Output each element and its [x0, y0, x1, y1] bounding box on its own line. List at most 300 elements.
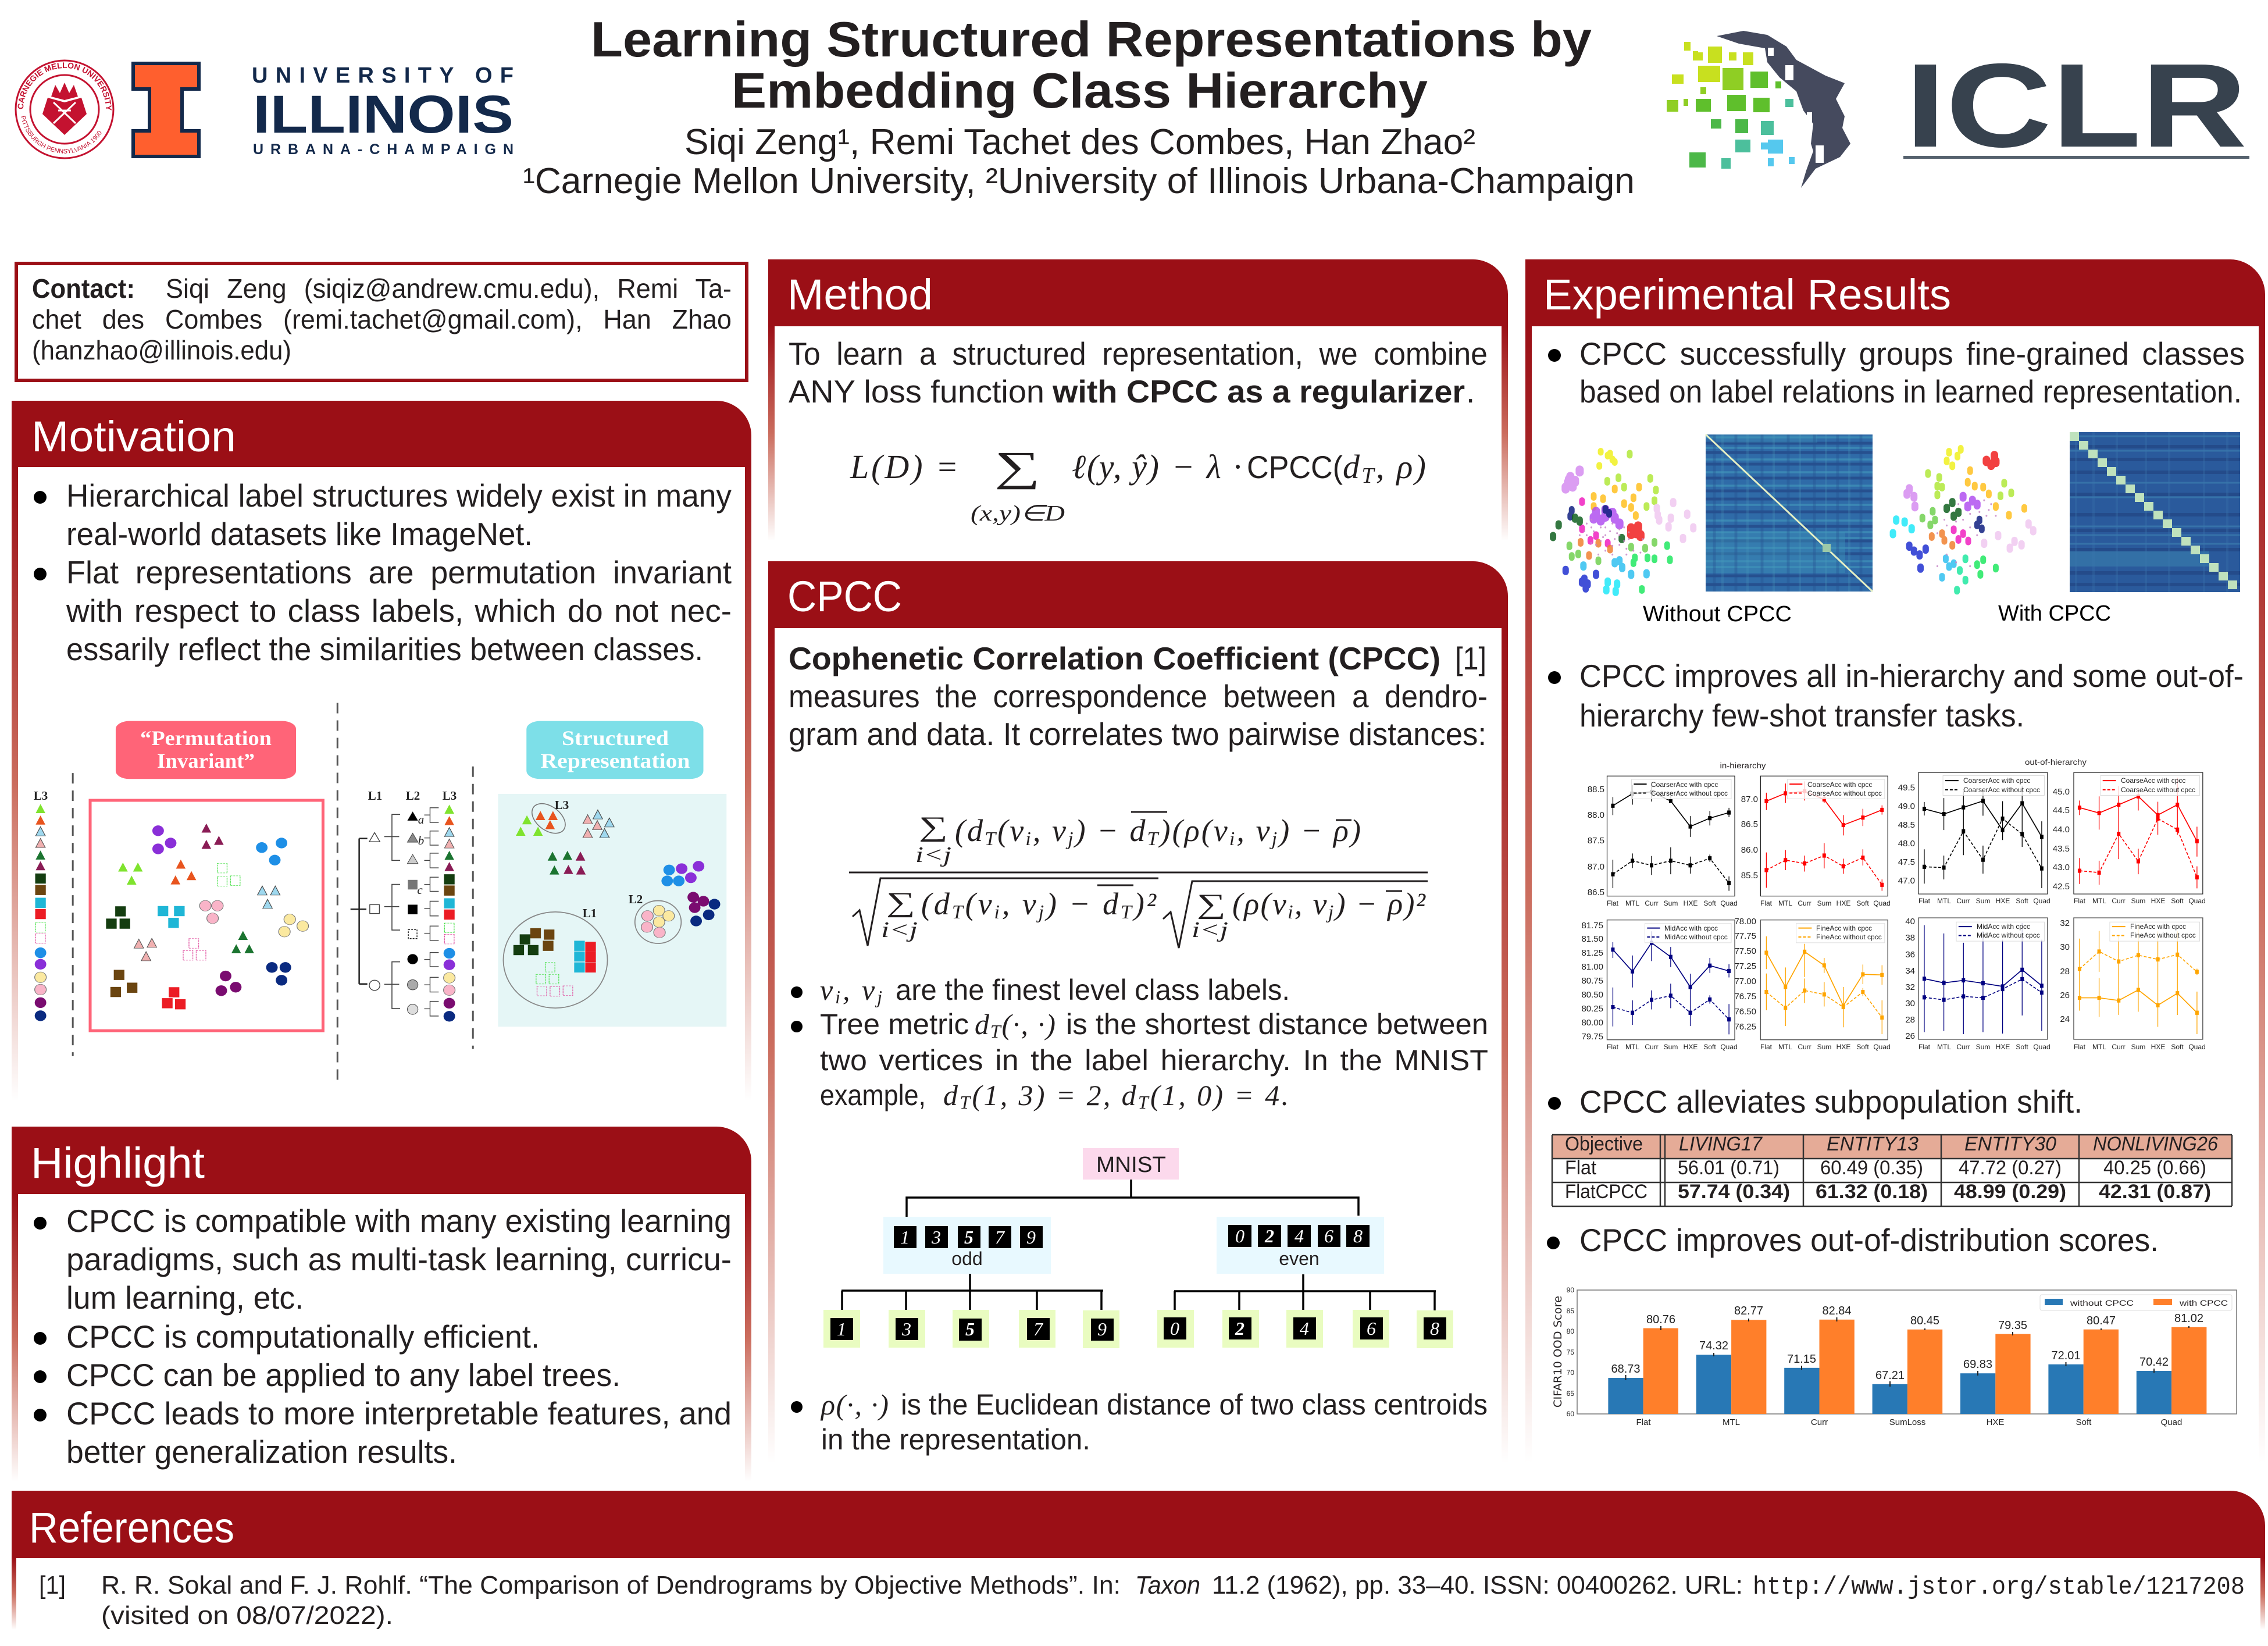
equation: CPCC fraction: ) − ρ) [1277, 813, 1361, 848]
value labels: 80.47 [2087, 1314, 2116, 1327]
chart titles: in-hierarchy [1720, 761, 1766, 770]
tick labels and legends: 44.5 [2053, 806, 2070, 815]
tick labels and legends: Flat [1607, 899, 1619, 907]
value labels: 79.35 [1998, 1319, 2027, 1332]
hierarchy level labels: a [418, 813, 424, 826]
row: Flat: 40.25 (0.66) [2103, 1157, 2206, 1179]
plot lines and error bars [1607, 772, 2203, 1040]
equation: CPCC fraction: i<j [1192, 918, 1228, 942]
leaf nodes: 8 [1430, 1318, 1439, 1339]
heading: Experimental Results [1543, 270, 1951, 319]
equation: CPCC fraction: (v [997, 813, 1024, 848]
intro text [789, 336, 1488, 409]
tick labels and legends: 49.5 [1898, 783, 1915, 793]
legend [2040, 1295, 2232, 1310]
tick labels and legends: Quad [2033, 897, 2051, 905]
tick labels and legends: MTL [2092, 1043, 2106, 1051]
heatmap without CPCC [1706, 434, 1873, 592]
label: permutation invariant: “Permutation [140, 726, 272, 750]
bullet list: definitions: are the finest level class labels. [896, 974, 1290, 1006]
tick labels and legends: 34 [1905, 966, 1915, 976]
row: Flat [1565, 1157, 2206, 1179]
tick labels and legends: Sum [1817, 1043, 1831, 1051]
panel: references [12, 1491, 2265, 1630]
tick labels and legends: MTL [1937, 1043, 1951, 1051]
definition text: measures the correspondence between a dendro- [789, 678, 1488, 714]
header row: Objective [1565, 1133, 1643, 1155]
node: even: 2 [1264, 1225, 1274, 1246]
tick labels and legends: Flat [1760, 899, 1773, 907]
bullet list: definitions: Tree metric [820, 1008, 969, 1041]
x axis categories: HXE [1987, 1417, 2004, 1427]
tick labels and legends: 77.25 [1734, 961, 1756, 971]
definition text: Cophenetic Correlation Coefficient (CPCC) [789, 640, 1440, 676]
intro text: . [1466, 373, 1475, 409]
hierarchy level labels: b [418, 833, 424, 847]
tick labels and legends: MidAcc without cpcc [1664, 933, 1728, 941]
affiliations: ¹Carnegie Mellon University, ²University of Illinois Urbana-Champaign [523, 161, 1635, 201]
tick labels and legends: 88.0 [1588, 810, 1604, 820]
y axis ticks and title: 60 [1567, 1410, 1574, 1418]
tick labels and legends: MTL [2092, 897, 2106, 905]
x axis categories: Quad [2161, 1417, 2182, 1427]
equation: CPCC fraction: ) − ρ)² [1333, 886, 1426, 921]
tick labels and legends: MTL [1778, 899, 1792, 907]
tick labels and legends: CoarserAcc without cpcc [1963, 786, 2040, 794]
tick labels and legends: 30 [2060, 942, 2070, 952]
node: even: 8 [1353, 1225, 1363, 1246]
value labels: 69.83 [1963, 1358, 1992, 1371]
bullet list: definitions: example, [820, 1079, 926, 1111]
bullet list: Hierarchical label structures widely exist in many [66, 478, 732, 514]
bullet list: definitions: T [1138, 1092, 1150, 1113]
tick labels and legends: 26 [2060, 991, 2070, 1000]
tick labels and legends: 86.5 [1588, 888, 1604, 897]
label: structured representation: Structured [562, 726, 669, 750]
citation: 11.2 (1962), pp. 33–40. ISSN: 00400262. URL: [1212, 1571, 1743, 1599]
tick labels and legends: MTL [1625, 1043, 1639, 1051]
tick labels and legends: 49.0 [1898, 801, 1915, 811]
equation: CPCC fraction: (ρ(v [1232, 886, 1286, 921]
equation: loss: T [1361, 464, 1375, 488]
tick labels and legends: Quad [1720, 1043, 1738, 1051]
bullet list: paradigms, such as multi-task learning, curricu- [66, 1241, 732, 1277]
tick labels and legends: MidAcc with cpcc [1664, 924, 1718, 932]
tick labels and legends: Flat [1918, 1043, 1931, 1051]
hierarchy level labels: L3 [555, 798, 569, 812]
tick labels and legends: 87.0 [1588, 862, 1604, 872]
tick labels and legends: HXE [1836, 899, 1850, 907]
hierarchy level labels: L1 [583, 906, 597, 920]
tick labels and legends: Flat [1918, 897, 1931, 905]
node: even: 0 [1235, 1225, 1244, 1246]
tick labels and legends: Curr [1956, 897, 1970, 905]
x axis categories: SumLoss [1889, 1417, 1925, 1427]
title: Embedding Class Hierarchy [732, 63, 1428, 119]
tick labels and legends: Soft [2016, 897, 2028, 905]
y axis ticks and title: 85 [1567, 1307, 1574, 1315]
bullet: subpopulation shift: CPCC alleviates subpopulation shift. [1579, 1084, 2082, 1120]
title [591, 12, 1592, 119]
equation: CPCC fraction: j [1326, 902, 1333, 923]
leaf nodes: 9 [1097, 1319, 1107, 1339]
tick labels and legends: 26 [1905, 1031, 1915, 1041]
value labels: 72.01 [2051, 1349, 2081, 1362]
tick labels and legends: Soft [1856, 1043, 1869, 1051]
tick labels and legends: HXE [1684, 1043, 1698, 1051]
y axis ticks and title: CIFAR10 OOD Score [1552, 1296, 1564, 1408]
panel: highlight [12, 1127, 751, 1481]
tick labels and legends: Quad [2033, 1043, 2051, 1051]
leaf nodes: 3 [901, 1319, 911, 1339]
leaf nodes: 5 [965, 1319, 975, 1339]
tick labels and legends: 77.50 [1734, 946, 1756, 956]
tick labels and legends: 80.75 [1581, 976, 1603, 986]
heading: CPCC [787, 572, 902, 621]
tick labels and legends: Curr [1645, 899, 1659, 907]
label: structured representation: Representation [541, 749, 690, 772]
tick labels and legends: Sum [1976, 1043, 1990, 1051]
node: odd: 5 [964, 1227, 973, 1248]
tick labels and legends: 43.5 [2053, 844, 2070, 854]
tick labels and legends: HXE [2151, 1043, 2165, 1051]
heading: References [29, 1504, 234, 1552]
tick labels and legends: MTL [1778, 1043, 1792, 1051]
equation: CPCC fraction: j [1036, 902, 1044, 923]
tick labels and legends: 47.5 [1898, 857, 1915, 867]
value labels: 68.73 [1611, 1363, 1641, 1376]
row: FlatCPCC: 57.74 (0.34) [1678, 1181, 1790, 1203]
tick labels and legends: CoarserAcc without cpcc [1651, 789, 1728, 797]
tick labels and legends: 81.25 [1581, 948, 1603, 958]
tick labels and legends: Quad [1873, 899, 1891, 907]
intro text: To learn a structured representation, we combine [789, 336, 1488, 372]
header row: NONLIVING26 [2093, 1133, 2218, 1155]
bullet: few-shot transfer: hierarchy few-shot transfer tasks. [1579, 697, 2024, 733]
tick labels and legends: 76.25 [1734, 1022, 1756, 1032]
tick labels and legends: FineAcc without cpcc [2130, 931, 2196, 939]
value labels: 80.45 [1910, 1314, 1939, 1327]
row: Flat: 56.01 (0.71) [1678, 1157, 1780, 1179]
tick labels and legends: Curr [1956, 1043, 1970, 1051]
tick labels and legends [1581, 776, 2206, 1051]
leaf nodes: 0 [1170, 1318, 1179, 1339]
value labels: 82.77 [1734, 1305, 1763, 1317]
node: even: 4 [1295, 1225, 1304, 1246]
equation: CPCC fraction: T [1121, 902, 1133, 923]
value labels: 67.21 [1875, 1369, 1905, 1382]
equation: CPCC fraction: i<j [881, 918, 918, 942]
equation: CPCC fraction [849, 811, 1428, 948]
equation: loss: L(D) = [850, 448, 958, 486]
bullet list: definitions: two vertices in the label hierarchy. In the MNIST [820, 1044, 1488, 1077]
line charts: in-hierarchy and out-of-hierarchy accuracy [1581, 757, 2206, 1051]
bullet list: definitions [791, 974, 1488, 1113]
axes [1577, 1290, 2237, 1414]
bullet list: definitions: is the shortest distance between [1066, 1008, 1488, 1041]
bars: with CPCC [1643, 1320, 2206, 1414]
tick labels and legends: 80.50 [1581, 990, 1603, 1000]
tick labels and legends: Soft [2016, 1043, 2028, 1051]
tick labels and legends: Curr [1798, 1043, 1811, 1051]
tick labels and legends: HXE [1836, 1043, 1850, 1051]
tick labels and legends: Soft [2171, 1043, 2184, 1051]
panel: contact: chet des Combes (remi.tachet@gmail.com), Han Zhao [32, 304, 732, 334]
logo: University of Illinois wordmark: ILLINOIS [253, 85, 513, 144]
bullet list: lum learning, etc. [66, 1280, 304, 1316]
y axis ticks and title: 90 [1567, 1286, 1574, 1294]
t-SNE scatter with CPCC [1893, 448, 2033, 592]
node: odd: 7 [995, 1227, 1005, 1248]
tick labels and legends: Sum [1664, 899, 1678, 907]
definition text [789, 640, 1488, 752]
tick labels and legends: Flat [1760, 1043, 1773, 1051]
panel: method [768, 259, 1508, 541]
heading: Highlight [31, 1139, 205, 1187]
leaf nodes: 7 [1033, 1319, 1044, 1339]
bar chart: CIFAR10 OOD score [1552, 1286, 2237, 1427]
bullet list: definitions: v [820, 974, 833, 1006]
equation: CPCC fraction: i [994, 902, 1000, 923]
row: Flat: 47.72 (0.27) [1959, 1157, 2062, 1179]
tick labels and legends: 36 [1905, 950, 1915, 960]
equation: CPCC fraction: ∑ [919, 811, 948, 842]
row: FlatCPCC: FlatCPCC [1565, 1181, 1647, 1203]
node: odd: 1 [900, 1227, 910, 1248]
ICLR wordmark: ICLR [1905, 39, 2247, 172]
bullet list: definitions: (1, 0) = 4. [1150, 1079, 1289, 1111]
bullet: few-shot transfer [1548, 658, 2244, 733]
table: subpopulation shift results [1552, 1133, 2232, 1206]
tick labels and legends: HXE [1996, 1043, 2010, 1051]
tick labels and legends: 42.5 [2053, 882, 2070, 892]
equation: CPCC fraction: i<j [915, 843, 951, 867]
bullet: rho definition [791, 1388, 1488, 1456]
node: even [1217, 1217, 1384, 1274]
definition text: gram and data. It correlates two pairwise distances: [789, 716, 1486, 752]
heading: Motivation [31, 412, 236, 461]
tick labels and legends: 28 [2060, 967, 2070, 977]
header row: LIVING17 [1679, 1133, 1763, 1155]
tick labels and legends: 40 [1905, 917, 1915, 927]
bullet list: definitions: j [875, 986, 882, 1007]
hierarchy level labels: L1 [368, 789, 382, 803]
equation: loss: ℓ(y, ŷ) [1072, 448, 1159, 486]
equation: CPCC fraction: ) − d [1044, 886, 1119, 921]
panel: motivation [12, 401, 751, 1101]
equation: CPCC fraction: j [1269, 828, 1277, 850]
tick labels and legends: Quad [2188, 897, 2206, 905]
bullet: rho definition: in the representation. [821, 1423, 1090, 1456]
equation: loss: ∑ [994, 443, 1040, 490]
hierarchy level labels: L2 [629, 892, 643, 906]
figure: without CPCC t-SNE and heatmap [1553, 434, 1873, 626]
tick labels and legends: 32 [2060, 918, 2070, 928]
y axis ticks and title: 80 [1567, 1327, 1574, 1335]
equation: loss: , ρ) [1376, 448, 1426, 486]
bullet: rho definition: is the Euclidean distance of two class centroids [901, 1388, 1488, 1421]
tick labels and legends: MTL [1625, 899, 1639, 907]
logo: Carnegie Mellon University seal [15, 59, 114, 159]
hierarchy level labels: L3 [34, 789, 48, 803]
bars: without CPCC [1608, 1355, 2171, 1414]
value labels: 82.84 [1822, 1305, 1852, 1317]
row: FlatCPCC: 42.31 (0.87) [2099, 1181, 2211, 1203]
caption: with CPCC: With CPCC [1998, 601, 2111, 626]
equation: CPCC fraction: , v [1033, 813, 1066, 848]
tick labels and legends: 48.0 [1898, 839, 1915, 849]
y axis ticks and title: 70 [1567, 1369, 1574, 1377]
tick labels and legends: 44.0 [2053, 825, 2070, 835]
hierarchy level labels: L3 [443, 789, 457, 803]
panel: contact: Siqi Zeng (siqiz@andrew.cmu.edu), Remi Ta- [166, 273, 732, 304]
bullet: groups classes: based on label relations in learned representation. [1579, 373, 2242, 409]
node: odd [883, 1217, 1051, 1274]
equation: CPCC fraction: , v [1002, 886, 1036, 921]
tick labels and legends: FineAcc with cpcc [1816, 924, 1872, 932]
tick labels and legends: 87.0 [1741, 795, 1758, 804]
tick labels and legends: 43.0 [2053, 863, 2070, 872]
tick labels and legends: Sum [1976, 897, 1990, 905]
label: structured representation [541, 726, 690, 772]
tick labels and legends: Curr [2112, 897, 2126, 905]
leaf nodes: 2 [1235, 1318, 1244, 1339]
tick labels and legends: Flat [2074, 1043, 2086, 1051]
tick labels and legends: HXE [1996, 897, 2010, 905]
citation: Taxon [1135, 1571, 1200, 1599]
logo: University of Illinois wordmark: UNIVERSITY OF [252, 63, 513, 88]
panel: contact [16, 263, 747, 380]
tick labels and legends: 81.75 [1581, 921, 1603, 931]
bullet list: definitions: , v [843, 974, 875, 1006]
equation: CPCC fraction: , v [1295, 886, 1327, 921]
figure: with CPCC t-SNE and heatmap [1893, 432, 2240, 626]
x axis categories: Curr [1811, 1417, 1828, 1427]
tick labels and legends: 77.00 [1734, 977, 1756, 986]
tick labels and legends: 85.5 [1741, 871, 1758, 881]
heatmap with CPCC [2070, 432, 2240, 592]
equation: loss: CPCC( [1247, 449, 1343, 485]
tick labels and legends: MidAcc without cpcc [1977, 931, 2040, 939]
tick labels and legends: 79.75 [1581, 1032, 1603, 1042]
citation [39, 1571, 2245, 1630]
tick labels and legends: 38 [1905, 933, 1915, 943]
tick labels and legends: 48.5 [1898, 820, 1915, 830]
chart titles: out-of-hierarchy [2025, 757, 2087, 767]
tick labels and legends: Curr [2112, 1043, 2126, 1051]
tick labels and legends: CoarseAcc with cpcc [2121, 776, 2185, 785]
tick labels and legends: Flat [1607, 1043, 1619, 1051]
tick labels and legends: Soft [1703, 1043, 1716, 1051]
logo: ICLR [1667, 31, 2249, 188]
bullet list: CPCC can be applied to any label trees. [66, 1357, 621, 1393]
bullet: out-of-distribution: CPCC improves out-of-distribution scores. [1579, 1222, 2159, 1258]
bullet list: CPCC is compatible with many existing learning [66, 1203, 732, 1239]
bullet list: definitions: d [943, 1079, 958, 1111]
bullet list: better generalization results. [66, 1434, 457, 1470]
equation: CPCC fraction: ∑ [886, 887, 915, 918]
row: Flat: Flat [1565, 1157, 1597, 1179]
bullet list: definitions: (·, ·) [1001, 1008, 1055, 1041]
tick labels and legends: MidAcc with cpcc [1977, 922, 2030, 931]
bullet list: definitions: T [990, 1021, 1002, 1042]
icon: head made of pixels [1667, 31, 1850, 188]
tick labels and legends: 78.00 [1734, 917, 1756, 927]
logo: Carnegie Mellon University seal: CARNEGIE MELLON UNIVERSITY [17, 62, 112, 111]
tick labels and legends: 47.0 [1898, 876, 1915, 886]
tick labels and legends: 80.25 [1581, 1004, 1603, 1014]
equation: CPCC fraction: i [1025, 828, 1031, 850]
bullet list: definitions: T [960, 1092, 971, 1113]
tick labels and legends: Quad [1720, 899, 1738, 907]
tick labels and legends: 88.5 [1588, 785, 1604, 795]
row: Flat: 60.49 (0.35) [1820, 1157, 1923, 1179]
y axis ticks and title: 75 [1567, 1348, 1574, 1356]
hierarchy level labels: c [417, 883, 423, 897]
y axis ticks and title: 65 [1567, 1390, 1574, 1398]
node: even: 6 [1324, 1225, 1333, 1246]
tick labels and legends: CoarserAcc with cpcc [1651, 781, 1718, 789]
figure: permutation invariant vs structured representation [34, 703, 726, 1086]
title: Learning Structured Representations by [591, 12, 1592, 67]
caption: without CPCC: Without CPCC [1643, 602, 1792, 626]
tick labels and legends: 30 [1905, 999, 1915, 1009]
heading: Method [787, 270, 933, 319]
logo: University of Illinois wordmark: URBANA-CHAMPAIGN [253, 141, 513, 158]
tick labels and legends: 86.5 [1741, 820, 1758, 829]
bullet list: definitions: (1, 3) = 2, d [972, 1079, 1137, 1111]
equation: loss: d [1343, 448, 1360, 486]
bullet list: definitions: i [835, 986, 840, 1007]
tick labels and legends: CoarseAcc without cpcc [2121, 786, 2195, 794]
equation: CPCC fraction: i [1229, 828, 1235, 850]
tick labels and legends: Sum [2131, 1043, 2145, 1051]
value labels [1611, 1305, 2203, 1382]
tick labels and legends: Sum [1817, 899, 1831, 907]
equation: loss: (x,y)∈D [971, 501, 1065, 526]
intro text: with CPCC as a regularizer [1052, 373, 1465, 409]
x axis categories: MTL [1723, 1417, 1740, 1427]
bullet list: real-world datasets like ImageNet. [66, 516, 533, 552]
panel: contact: (hanzhao@illinois.edu) [32, 335, 291, 365]
node: odd: 3 [931, 1227, 941, 1248]
citation: [1] [39, 1571, 66, 1599]
tick labels and legends: Curr [1645, 1043, 1659, 1051]
error bars [1626, 1317, 2189, 1387]
hierarchy level labels [34, 789, 643, 920]
diagram: MNIST label tree [823, 1148, 1453, 1348]
tick labels and legends: 80.00 [1581, 1018, 1603, 1028]
panel: contact: Contact: [32, 273, 135, 304]
x axis categories: Flat [1636, 1417, 1651, 1427]
tick labels and legends: 76.75 [1734, 992, 1756, 1002]
tick labels and legends: FineAcc without cpcc [1816, 933, 1882, 941]
equation: CPCC fraction: )² [1132, 886, 1157, 921]
tick labels and legends: 86.0 [1741, 845, 1758, 855]
bullet: groups classes [1548, 336, 2245, 409]
leaf nodes: 1 [837, 1319, 846, 1339]
tick labels and legends: 24 [2060, 1014, 2070, 1024]
panel: CPCC [768, 561, 1508, 1463]
citation: R. R. Sokal and F. J. Rohlf. “The Comparison of Dendrograms by Objective Methods”. In: [101, 1571, 1121, 1599]
tick labels and legends: Soft [1856, 899, 1869, 907]
hierarchy level labels: L2 [406, 789, 420, 803]
bullet list: essarily reflect the similarities between classes. [66, 631, 703, 667]
equation: loss: − λ · [1172, 448, 1242, 486]
row: FlatCPCC: 48.99 (0.29) [1954, 1181, 2066, 1203]
logo: University of Illinois wordmark [252, 63, 513, 158]
tick labels and legends: Sum [1664, 1043, 1678, 1051]
